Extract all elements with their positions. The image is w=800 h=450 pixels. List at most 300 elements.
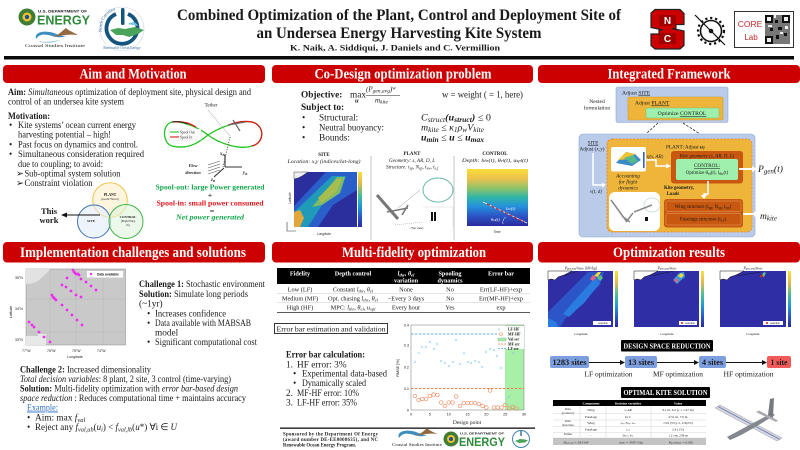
table: fidelity levels xyxy=(277,268,530,312)
text: objective: • xyxy=(302,134,305,144)
callout: this work xyxy=(40,206,100,225)
text: challenge 2: val,lb xyxy=(118,426,133,434)
box: plant structure: sw xyxy=(725,206,730,210)
logo: NC State block S xyxy=(651,10,684,49)
panel: co-design optimization problem xyxy=(272,65,533,240)
flow: site reduction: 1 site xyxy=(770,358,788,367)
heading: integrated framework: Integrated Framework xyxy=(608,66,731,82)
table: optimal kite values: Decision variables xyxy=(615,401,642,405)
text: error bar calculation: HF error: 3% xyxy=(297,360,347,370)
text: aim: control of an undersea kite system xyxy=(8,97,125,108)
arrow: geometry loads xyxy=(664,181,708,199)
text: aim: Aim: Simultaneous optimization of deployment site, physical design and xyxy=(8,87,251,98)
chart: data availability map: Longitude xyxy=(67,355,83,359)
text: motivation: Sub-optimal system solution xyxy=(24,170,121,180)
text: objective: ρ xyxy=(457,124,463,134)
figure: control depth chart: Time xyxy=(494,230,501,234)
logo: US Department of Energy: ENERGY xyxy=(37,14,91,28)
text: objective: Objective: xyxy=(301,90,342,100)
header xyxy=(18,6,794,52)
label: design space reduction xyxy=(621,340,713,352)
box: plant structure: ) xyxy=(724,218,726,222)
label: generated power: P xyxy=(758,165,764,175)
table: optimal kite values: Pgen/mkite = 0.092 xyxy=(668,440,693,444)
text: motivation: ➢ xyxy=(16,170,24,180)
chart: data availability map: 33°N xyxy=(15,338,23,342)
text: challenge 2: Solution: Multi-fidelity optimization with error bar-based design xyxy=(20,384,238,394)
chart: LF heat map: selection xyxy=(598,322,609,325)
table: optimal kite values: Pgen,avg = 28.4 kW xyxy=(562,440,590,444)
diagram: plant site control venn: PLANT xyxy=(104,193,117,197)
diagram: coupled framework: PLANT: Adjust up xyxy=(666,144,705,150)
table: fidelity levels: Medium (MF) xyxy=(282,296,318,302)
panel: implementation challenges and solutions xyxy=(3,242,265,434)
text: error bar calculation: Experimental data-based xyxy=(302,370,387,380)
box: plant structure: , N xyxy=(712,205,719,210)
text: error bar calculation: MF-HF error: 10% xyxy=(297,389,359,399)
header rule xyxy=(4,56,794,60)
figure: plant geometry: (Top view) xyxy=(411,226,423,230)
table: fidelity levels: Err(MF-HF)+exp xyxy=(479,296,523,302)
text: objective: 1 xyxy=(454,126,458,134)
table: fidelity levels: spl xyxy=(370,306,376,312)
figure: plant geometry: sp xyxy=(419,166,423,170)
text: challenge 2: Reject any f xyxy=(35,423,78,433)
box: plant structure xyxy=(664,199,743,228)
logo: Department of Energy small: U.S. DEPARTMENT OF xyxy=(460,432,504,436)
figure: plant geometry: sw xyxy=(426,166,431,170)
title xyxy=(177,7,622,52)
table: fidelity levels: Depth control xyxy=(335,270,372,278)
box: plant structure: sp xyxy=(718,206,722,210)
table: fidelity levels: thr xyxy=(363,298,369,302)
table: optimal kite values: Kite xyxy=(565,419,571,423)
table: optimal kite values: Value xyxy=(674,401,683,405)
text: objective: max xyxy=(471,136,485,144)
chart: data availability map: 76°W xyxy=(47,349,56,353)
text: objective: kite xyxy=(428,126,439,134)
logo: US Department of Energy: U.S. DEPARTMENT OF xyxy=(38,10,87,14)
text: challenge 2: val xyxy=(77,417,86,424)
text: motivation: harvesting potential – high! xyxy=(18,131,111,141)
table: fidelity levels: Fidelity xyxy=(290,270,311,278)
text: error bar calculation: Error bar calculation: xyxy=(286,350,365,360)
text: objective: Structural: xyxy=(319,114,358,124)
panel: multi-fidelity optimization xyxy=(272,242,535,449)
icon: crossed gear xyxy=(695,15,725,45)
text: challenge 2: ) < f xyxy=(103,423,118,433)
chart: RMSE by design point: 0.3 xyxy=(404,344,409,348)
chart: RMSE by design point: MF-HF xyxy=(508,332,521,336)
text: objective xyxy=(301,86,523,144)
text: objective: Subject to: xyxy=(301,103,344,113)
chart: RMSE by design point: 0 xyxy=(410,412,412,416)
table: optimal kite values: Wing xyxy=(587,421,595,425)
chart: RMSE by design point: LF-HF xyxy=(508,328,520,332)
text: objective: • xyxy=(302,114,305,124)
diagram: coupled framework: SITE xyxy=(588,142,598,146)
text: power balance: Spool-in: small power consumed xyxy=(156,198,264,208)
table: optimal kite values: 9.1 m, 6.2 (c = 1.47 m) xyxy=(662,408,694,413)
table: optimal kite values: Wing xyxy=(587,408,595,412)
diagram: plant site control venn: CONTROL xyxy=(120,215,137,219)
chart: RMSE by design point: 0.2 xyxy=(404,366,409,370)
chart: HF heat map: selection xyxy=(770,322,781,325)
arrow: site to plant xyxy=(590,153,606,195)
table: fidelity levels: dynamics xyxy=(437,278,463,284)
panel: optimization results xyxy=(538,242,800,445)
figure: figure-8 kite path: Tether xyxy=(205,104,218,108)
table: fidelity levels: Yes xyxy=(445,304,455,312)
text: motivation: Motivation: xyxy=(8,112,50,122)
logo: NC ocean energy small xyxy=(512,430,530,448)
chart: HF heat map xyxy=(720,266,791,336)
label: optimal kite solution xyxy=(621,387,710,398)
diagram: plant site control venn: th) xyxy=(126,223,130,227)
figure: plant geometry: s,f xyxy=(435,166,439,172)
figure: control depth chart: lthr(t) xyxy=(506,206,516,211)
table: optimal kite values: - xyxy=(590,434,592,438)
table: fidelity levels: , θ xyxy=(404,270,412,278)
title: K. Naik, A. Siddiqui, J. Daniels and C. Vermillion xyxy=(290,44,501,52)
figure: figure-8 kite path: B xyxy=(244,172,248,176)
table: optimal kite values: 13.9 (5%), 5, 2.9(2%) xyxy=(663,421,693,426)
diagram: nested formulation: Adjust PLANT xyxy=(635,100,670,106)
title: Combined Optimization of the Plant, Control and Deployment Site of xyxy=(177,7,622,24)
callout: this work: work xyxy=(40,215,59,225)
text: flight dynamics caption: for flight xyxy=(619,178,638,186)
logo: NC State block S: C xyxy=(664,34,671,45)
box: plant structure: sp xyxy=(709,206,712,210)
chart: RMSE by design point: 0.1 xyxy=(404,387,409,391)
table: optimal kite values: Component xyxy=(583,401,600,405)
text: objective: V xyxy=(467,124,475,134)
flow: site reduction: HF optimization xyxy=(724,370,774,378)
text: objective: (u xyxy=(445,112,454,124)
text: challenge 2: • xyxy=(27,414,30,424)
figure: control depth chart xyxy=(461,152,528,234)
table: optimal kite values: mkite = 3097.3 kg xyxy=(619,440,643,444)
box: kite geometry and control: (t) xyxy=(724,171,729,176)
diagram: plant site control venn: SITE xyxy=(87,219,96,223)
figure: plant geometry: Structure: t xyxy=(386,164,410,170)
chart: data availability map xyxy=(9,269,126,359)
chart: RMSE by design point xyxy=(396,324,526,426)
text: challenge 1: • xyxy=(147,310,150,320)
heading: multi-fidelity: Multi-fidelity optimization xyxy=(342,245,486,261)
label: kite mass: m xyxy=(760,212,767,222)
chart: RMSE by design point: 0 xyxy=(407,408,409,412)
figure: figure-8 kite path: x xyxy=(220,152,222,157)
table: optimal kite values: tsp, Nsp, tsw xyxy=(621,421,636,426)
text: power balance: Net power generated xyxy=(175,212,244,222)
logo: Coastal Studies Institute: Coastal Studies Institute xyxy=(25,43,85,48)
diagram: plant site control venn: (Flight+Dep xyxy=(121,219,136,223)
box: plant structure: , t xyxy=(722,205,726,210)
arrow: power output xyxy=(739,166,757,172)
figure: figure-8 kite path: Flow xyxy=(189,163,198,168)
text: error bar calculation: • xyxy=(293,379,296,389)
text: objective: w xyxy=(462,126,468,134)
text: flight dynamics caption xyxy=(615,174,640,192)
text: objective: ≤ xyxy=(439,134,449,144)
text: error bar calculation: • xyxy=(293,370,296,380)
table: fidelity levels: No xyxy=(446,286,454,294)
chart: MF heat map: Longitude xyxy=(660,332,674,336)
table: fidelity levels: Error bar xyxy=(488,270,514,278)
table: optimal kite values: 0.51 m, 7.0 m xyxy=(669,415,688,420)
table: fidelity levels: No xyxy=(446,296,454,302)
text: objective: ) xyxy=(471,112,475,124)
diagram: coupled framework: Adjust (x,y) xyxy=(579,146,605,152)
figure: control depth chart: θel(t) xyxy=(491,217,500,222)
logo: Coastal Studies Institute small: Coastal Studies Institute xyxy=(392,442,442,447)
heading: optimization results xyxy=(538,242,800,262)
chart: RMSE by design point: Design point xyxy=(453,420,482,426)
figure: figure-8 kite path: direction xyxy=(185,170,201,175)
text: error bar estimation label: Error bar estimation and validation xyxy=(276,324,386,334)
table: optimal kite values: structure xyxy=(562,423,574,427)
table: fidelity levels: thr xyxy=(399,272,405,278)
text: challenge 2: (u*) ∀i ∈ U xyxy=(132,423,177,433)
table: optimal kite values: Fuselage xyxy=(585,428,598,432)
box: kite geometry and control: Optimize θ xyxy=(686,171,708,176)
text: challenge 2: space reduction : Reduces computational time + maintains accuracy xyxy=(20,394,246,404)
box: kite geometry and control xyxy=(671,151,743,184)
arrow: eta to control: η(s, AR) xyxy=(647,155,664,160)
figure: plant geometry: sp xyxy=(410,166,413,170)
flow: site reduction: 13 sites xyxy=(628,358,654,367)
figure: control depth chart: Depth: l thr(t), θ el(t), u spl(t) xyxy=(461,157,528,164)
logo: Department of Energy small xyxy=(444,432,505,449)
text: challenge 2: i xyxy=(101,426,103,434)
text: sponsor acknowledgement: Renewable Ocean Energy Program. xyxy=(283,444,356,448)
text: challenge 2: • xyxy=(27,423,30,433)
table: optimal kite values: 2.4 (1%) xyxy=(672,428,684,432)
text: objective: kite xyxy=(380,100,389,106)
table: optimal kite values: 1.2 cm, 238 m xyxy=(668,434,688,438)
chart: RMSE by design point: 5 xyxy=(429,412,431,416)
chart: data availability map: 75°W xyxy=(72,349,81,353)
text: motivation: • xyxy=(9,150,12,160)
figure: figure-8 kite path: z xyxy=(211,178,213,183)
text: challenge 1: Increases confidence xyxy=(155,308,226,320)
flow: site reduction: MF optimization xyxy=(653,370,704,378)
table: optimal kite values: ts,f xyxy=(626,428,630,432)
text: objective: u ≤ u xyxy=(449,134,470,144)
table: fidelity levels: el xyxy=(411,272,415,278)
table: fidelity levels: ~Every 3 days xyxy=(388,296,425,302)
heading: multi-fidelity xyxy=(272,242,533,262)
text: challenge 2: Aim: max f xyxy=(35,414,77,424)
callout: this work: This xyxy=(41,206,58,216)
arrow: geometry loads: Kite geometry, xyxy=(664,186,695,191)
logo: North Carolina Renewable Ocean Energy Program: North Carolina xyxy=(98,8,116,32)
chart: LF heat map xyxy=(548,266,618,336)
figure: kite render xyxy=(715,398,782,441)
text: motivation: Past focus on dynamics and control. xyxy=(18,140,138,150)
chart: MF heat map: selection xyxy=(685,322,696,325)
title: an Undersea Energy Harvesting Kite System xyxy=(256,25,542,42)
figure: site heat map: Location: x,y (indices/lat-long) xyxy=(286,158,361,165)
text: motivation: due to coupling; to avoid: xyxy=(18,160,103,170)
logo: NC State block S: N xyxy=(664,16,671,27)
chart: RMSE by design point: 30 xyxy=(522,412,526,416)
text: error bar calculation: LF-HF error: 35% xyxy=(297,398,357,408)
text: motivation: ➢ xyxy=(16,179,24,189)
chart: RMSE by design point: 20 xyxy=(484,412,489,416)
text: objective: u xyxy=(355,98,359,104)
arrow: geometry loads: Loads xyxy=(667,192,679,197)
divider line xyxy=(371,156,454,240)
table: optimal kite values: geometry xyxy=(562,411,575,415)
heading: aim and motivation: Aim and Motivation xyxy=(80,66,186,82)
chart: data availability map: 35°N xyxy=(15,276,23,280)
figure: figure-8 kite path: B xyxy=(221,153,225,157)
figure: plant geometry: , t xyxy=(430,164,435,170)
chart: RMSE by design point: 0.4 xyxy=(404,324,409,328)
table: optimal kite values: Fuselage xyxy=(585,415,598,419)
chart: RMSE by design point: Val set xyxy=(508,338,519,342)
table: fidelity levels: thr xyxy=(349,306,355,312)
label: generated power: gen xyxy=(764,168,774,176)
text: challenge 2: val,ub xyxy=(78,426,94,434)
diagram: coupled framework xyxy=(579,134,759,237)
diagram: nested formulation: Adjust SITE xyxy=(622,90,651,96)
text: challenge 1: Significant computational cost xyxy=(155,337,257,348)
table: fidelity levels: variation xyxy=(394,278,419,284)
table: fidelity levels: None xyxy=(399,286,413,294)
chart: RMSE by design point: 25 xyxy=(503,412,507,416)
figure: plant geometry: PLANT xyxy=(404,152,421,157)
figure: figure-8 kite path: y xyxy=(243,171,245,176)
table: fidelity levels: , θ xyxy=(368,296,375,302)
text: aim xyxy=(8,87,251,108)
text: flight dynamics caption: dynamics xyxy=(618,186,638,192)
text: challenge 2: Example: xyxy=(27,404,58,414)
table: fidelity levels: exp xyxy=(496,304,506,312)
figure: site heat map xyxy=(286,153,362,236)
text: objective: • xyxy=(302,124,305,134)
text: power balance xyxy=(156,182,265,222)
table: optimal kite values: Kite xyxy=(565,407,571,411)
figure: plant geometry: , t xyxy=(422,164,427,170)
logo: North Carolina Renewable Ocean Energy Program xyxy=(98,6,144,52)
text: objective: ≤ 0 xyxy=(475,114,491,124)
arrow: mass output xyxy=(743,211,759,217)
logo: Coastal Studies Institute xyxy=(25,28,85,48)
text: challenge 1: • xyxy=(147,319,150,329)
text: power balance: Spool-out: large Power generated xyxy=(156,182,265,192)
table: fidelity levels: MPC: l xyxy=(331,304,349,312)
arrow: eta to control xyxy=(646,155,671,168)
logo: Coastal Studies Institute small xyxy=(392,428,442,447)
text: objective: m xyxy=(375,96,380,104)
text: challenge 1: (~1yr) xyxy=(139,298,163,310)
chart: MF heat map: Pgen,avg/mkite xyxy=(657,266,677,270)
table: fidelity levels: el xyxy=(370,288,374,294)
table: optimal kite values: Dthr, lthr xyxy=(622,434,633,438)
text: objective: max xyxy=(350,90,366,100)
figure: control depth chart: CONTROL xyxy=(482,152,508,157)
table: fidelity levels: thr xyxy=(358,288,364,294)
box: plant structure: Wing structure (t xyxy=(675,205,709,210)
text: challenge 2 xyxy=(20,366,246,434)
text: error bar calculation xyxy=(286,350,387,408)
table: fidelity levels: Constant l xyxy=(333,286,358,294)
figure: figure-8 kite path: Spool Out xyxy=(180,130,195,134)
chart: LF heat map: Pgen,avg/mkite [kW/kg] xyxy=(564,266,598,270)
flow: site reduction: LF optimization xyxy=(584,370,633,378)
box: kite geometry and control: (t), l xyxy=(711,171,720,176)
text: error bar calculation: 2. xyxy=(286,389,293,399)
text: challenge 1: Solution: Simulate long periods xyxy=(139,290,248,300)
text: objective: w xyxy=(392,86,396,92)
panel: integrated framework xyxy=(538,65,800,237)
table: fidelity levels: Opt. chasing l xyxy=(328,296,363,302)
box: kite geometry and control: thr xyxy=(719,172,724,176)
text: objective: (P xyxy=(366,86,373,94)
table: fidelity levels: Spooling xyxy=(438,270,462,278)
text: sponsor acknowledgement: (award number DE-EE0008635), and NC xyxy=(283,438,379,443)
chart: LF heat map: Longitude xyxy=(574,332,588,336)
text: error bar calculation: Dynamically scaled xyxy=(302,379,366,389)
text: objective: m xyxy=(421,124,428,134)
chart: RMSE by design point: MF err xyxy=(508,342,520,346)
text: flight dynamics caption: Accounting xyxy=(615,174,640,180)
text: objective: Neutral buoyancy: xyxy=(319,124,384,134)
table: fidelity levels: , θ xyxy=(354,304,361,312)
logo: US Department of Energy xyxy=(18,8,91,28)
text: challenge 1: model xyxy=(155,328,179,338)
logo: North Carolina Renewable Ocean Energy Program: Renewable Ocean Energy xyxy=(103,46,141,50)
table: fidelity levels: , θ xyxy=(364,286,370,294)
table: fidelity levels: l xyxy=(398,270,399,278)
table: optimal kite values: D, L xyxy=(624,415,631,420)
figure: figure-8 kite path xyxy=(164,104,262,183)
figure: plant geometry: , N xyxy=(413,164,420,170)
table: fidelity levels: Every hour xyxy=(392,304,421,312)
label: optimal kite solution: OPTIMAL KITE SOLUTION xyxy=(624,389,708,397)
heading: co-design xyxy=(272,65,533,83)
text: challenge 2: Challenge 2: Increased dimensionality xyxy=(20,366,151,376)
chart: RMSE by design point: RMSE [%] xyxy=(396,359,400,377)
box: plant structure: ) xyxy=(730,205,732,210)
arrow: site to plant: v(t, d) xyxy=(590,190,602,195)
figure: figure-8 kite path: Spool In xyxy=(180,136,192,140)
text: objective: C xyxy=(421,114,427,124)
label: kite mass: kite xyxy=(767,214,777,222)
box: kite geometry and control: Kite geometry (s, AR, D, L) xyxy=(679,154,735,160)
text: objective: struct xyxy=(453,116,473,124)
chart: HF heat map: Pgen,avg/mkite xyxy=(743,266,763,270)
table: optimal kite values xyxy=(553,400,706,445)
text: motivation xyxy=(8,112,144,189)
text: objective: struct xyxy=(428,116,446,124)
text: challenge 1 xyxy=(139,280,265,348)
text: objective: min xyxy=(427,136,439,144)
text: motivation: Kite systems’ ocean current energy xyxy=(18,121,136,131)
heading: aim and motivation xyxy=(3,65,265,83)
diagram: plant site control venn xyxy=(78,183,143,238)
table: fidelity levels: High (HF) xyxy=(287,304,313,312)
diagram: nested formulation: formulation xyxy=(584,104,610,112)
chart: data availability map: 34°N xyxy=(15,307,23,311)
box: plant structure: Fuselage structure (t xyxy=(680,218,721,222)
chart: data availability map: Latitude xyxy=(9,306,13,318)
text: challenge 2: Total decision variables: 8 plant, 2 site, 3 control (time-varying) xyxy=(20,374,231,385)
figure: figure-8 kite path: B xyxy=(212,179,216,183)
